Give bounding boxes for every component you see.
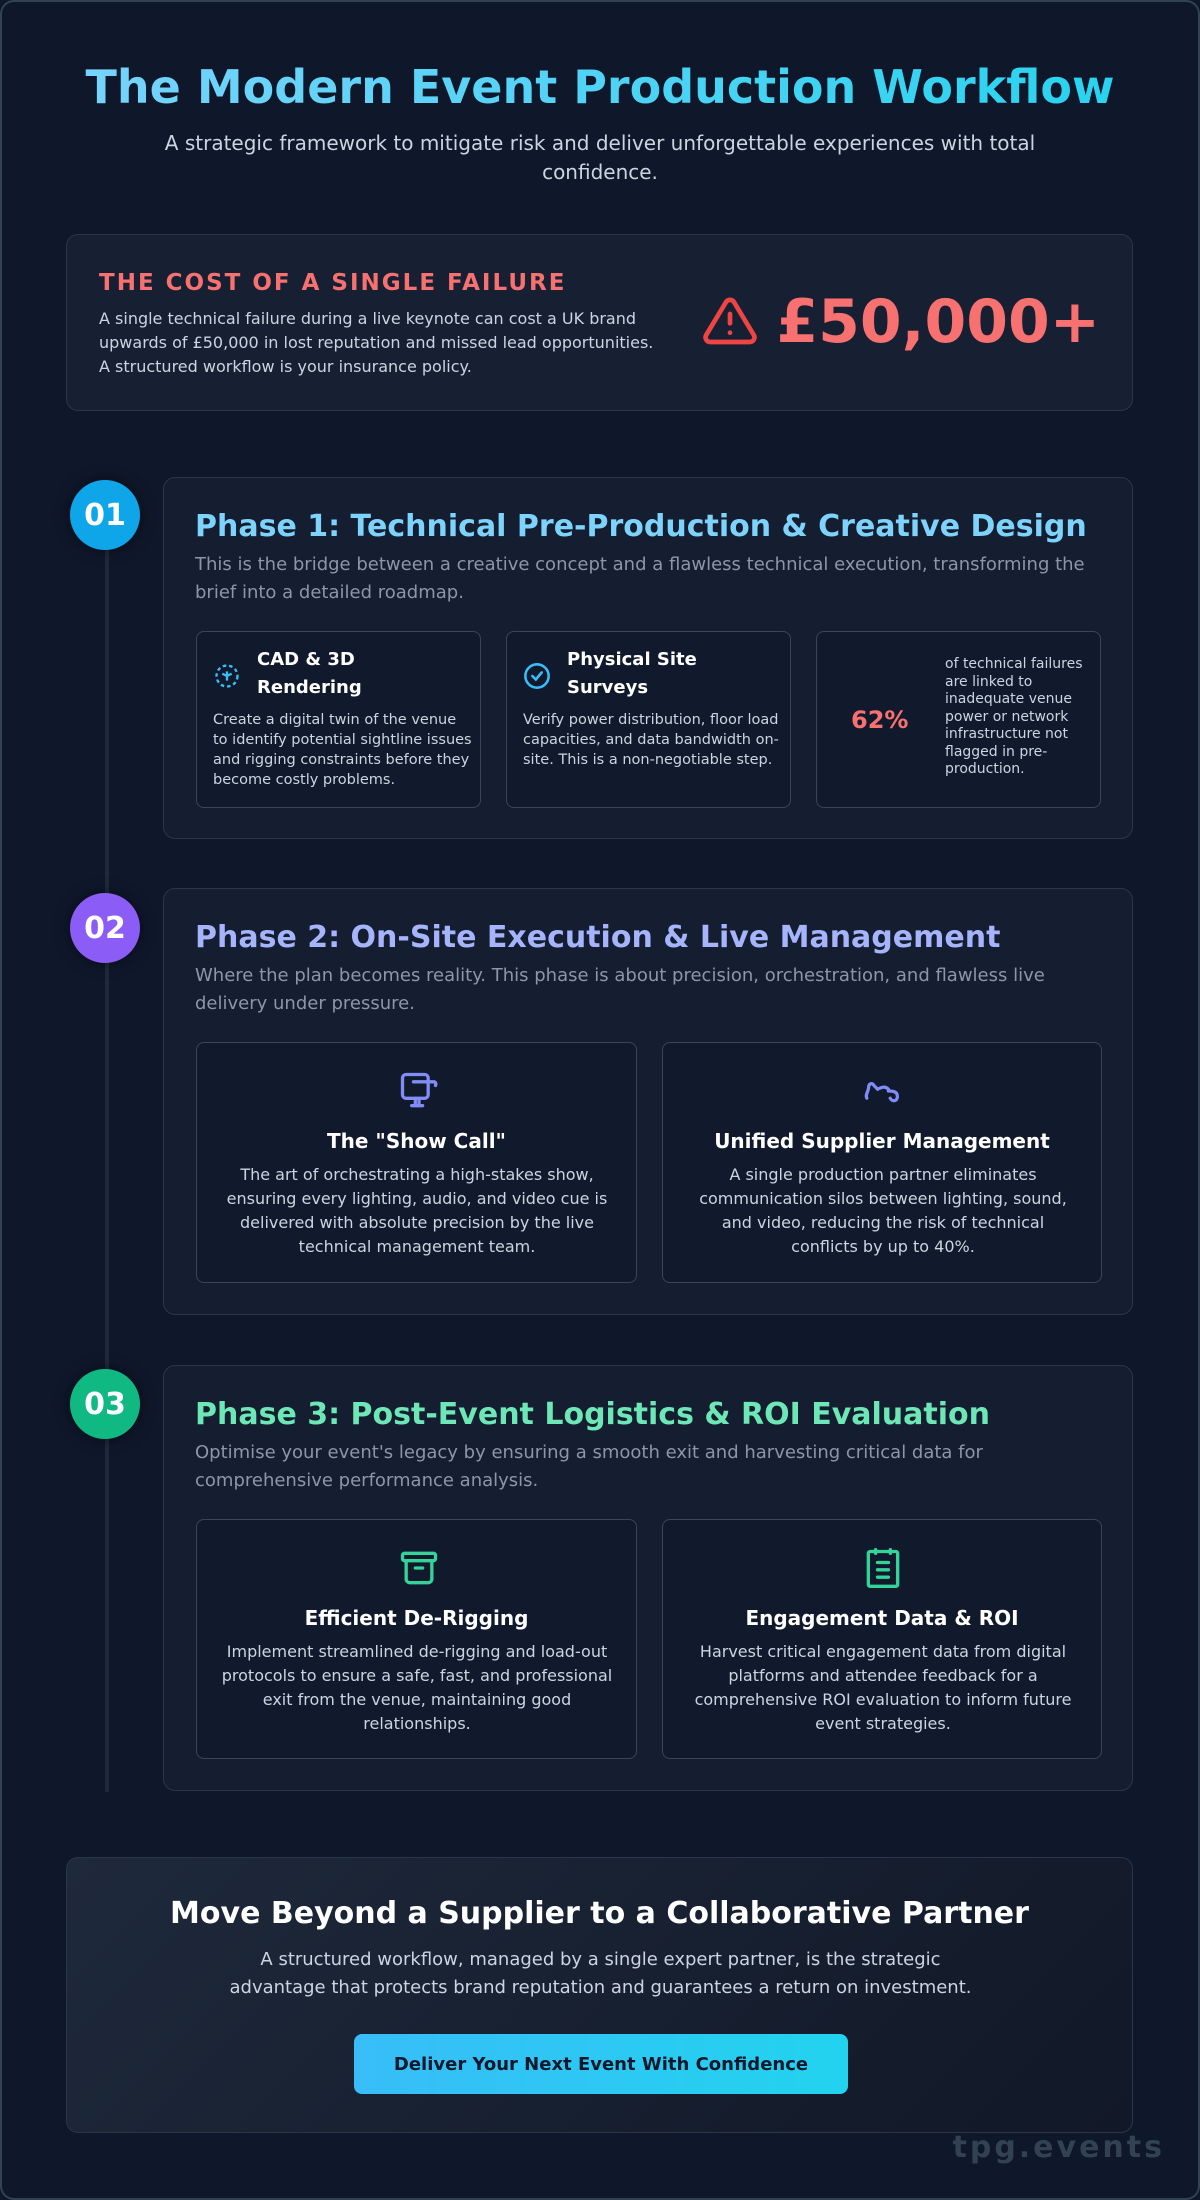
icon: warning: [703, 298, 757, 344]
heading: cost: THE COST OF A SINGLE FAILURE: [99, 270, 566, 296]
text: CTA: A structured workflow, managed by a single expert partner, is the strategic advantage that protects brand reputation and guarantees a return on investment.: [230, 1949, 972, 1998]
text: de-rigging: Implement streamlined de-rigging and load-out protocols to ensure a safe, fast, and professional exit from the venue, maintaining good relationships.: [222, 1642, 612, 1733]
subcard: ROI: [662, 1519, 1102, 1759]
subcard: supplier management: [662, 1042, 1102, 1283]
heading: phase 1: Phase 1: Technical Pre-Production & Creative Design: [195, 509, 1087, 544]
circle 01: [70, 480, 140, 550]
stat: 62%: 62%: [851, 706, 908, 734]
panel: CTA: [66, 1857, 1133, 2133]
panel: phase 1: [163, 477, 1133, 839]
subcard: CAD: [196, 631, 481, 808]
circle 01: 01: [84, 498, 126, 532]
heading: ROI: Engagement Data & ROI: [745, 1606, 1019, 1630]
icon: clipboard: [866, 1548, 900, 1588]
heading: CTA: Move Beyond a Supplier to a Collaborative Partner: [170, 1896, 1029, 1931]
stat: 50,000: £50,000+: [776, 287, 1100, 357]
text: surveys: Verify power distribution, floor load capacities, and data bandwidth on-site. This is a non-negotiable step.: [523, 712, 779, 768]
icon: cube: [215, 664, 239, 688]
icon: handshake: [864, 1082, 899, 1102]
heading: surveys: Surveys: [567, 677, 648, 698]
panel: cost of failure: [66, 234, 1133, 411]
subcard: 62% stat: [816, 631, 1101, 808]
text: phase 2 desc: Where the plan becomes reality. This phase is about precision, orchestration, and flawless live delivery under pressure.: [195, 965, 1045, 1014]
panel: phase 3: [163, 1365, 1133, 1791]
heading: de-rigging: Efficient De-Rigging: [305, 1606, 528, 1630]
circle 02: [70, 893, 140, 963]
title: The Modern Event Production Workflow: [86, 60, 1114, 114]
icon: archive: [400, 1552, 438, 1584]
circle 03: [70, 1369, 140, 1439]
text: ROI: Harvest critical engagement data from digital platforms and attendee feedback for a comprehensive ROI evaluation to inform future event strategies.: [695, 1642, 1071, 1733]
heading: surveys: Physical Site: [567, 649, 697, 670]
panel: phase 2: [163, 888, 1133, 1315]
timeline line: [105, 515, 109, 1792]
subcard: site surveys: [506, 631, 791, 808]
heading: phase 3: Phase 3: Post-Event Logistics & ROI Evaluation: [195, 1397, 990, 1432]
text: show call: The art of orchestrating a high-stakes show, ensuring every lighting, audio, and video cue is delivered with absolute precision by the live technical management team.: [227, 1165, 607, 1256]
icon: check: [524, 663, 550, 689]
text: supplier: A single production partner eliminates communication silos between lighting, sound, and video, reducing the risk of technical conflicts by up to 40%.: [699, 1165, 1067, 1256]
watermark: tpg.events: [952, 2130, 1165, 2165]
heading: phase 2: Phase 2: On-Site Execution & Live Management: [195, 920, 1000, 955]
heading: show call: The "Show Call": [327, 1129, 506, 1153]
button: [354, 2034, 848, 2094]
heading: CAD: CAD & 3D: [257, 649, 355, 670]
heading: surveys: [567, 649, 697, 698]
heading: supplier: Unified Supplier Management: [714, 1129, 1050, 1153]
button: Deliver Your Next Event With Confidence: [394, 2054, 808, 2074]
text: CAD: Create a digital twin of the venue to identify potential sightline issues and rigging constraints before they become costly problems.: [213, 712, 472, 788]
subcard: de-rigging: [196, 1519, 637, 1759]
text: phase 3 desc: Optimise your event's legacy by ensuring a smooth exit and harvesting critical data for comprehensive performance analysis.: [195, 1442, 983, 1491]
text: phase 1 desc: This is the bridge between a creative concept and a flawless technical execution, transforming the brief into a detailed roadmap.: [195, 554, 1085, 603]
subcard: show call: [196, 1042, 637, 1283]
icon: monitor: [400, 1072, 438, 1108]
heading: CAD: Rendering: [257, 677, 362, 698]
circle 02: 02: [84, 910, 126, 946]
text: cost body: A single technical failure during a live keynote can cost a UK brand upwards of £50,000 in lost reputation and missed lead opportunities. A structured workflow is your insurance policy.: [99, 309, 653, 376]
circle 03: 03: [84, 1386, 126, 1422]
heading: CAD: [257, 649, 362, 698]
subtitle: A strategic framework to mitigate risk and deliver unforgettable experiences with total confidence.: [165, 131, 1035, 184]
text: stat: of technical failures are linked to inadequate venue power or network infrastructure not flagged in pre-production.: [945, 656, 1083, 777]
